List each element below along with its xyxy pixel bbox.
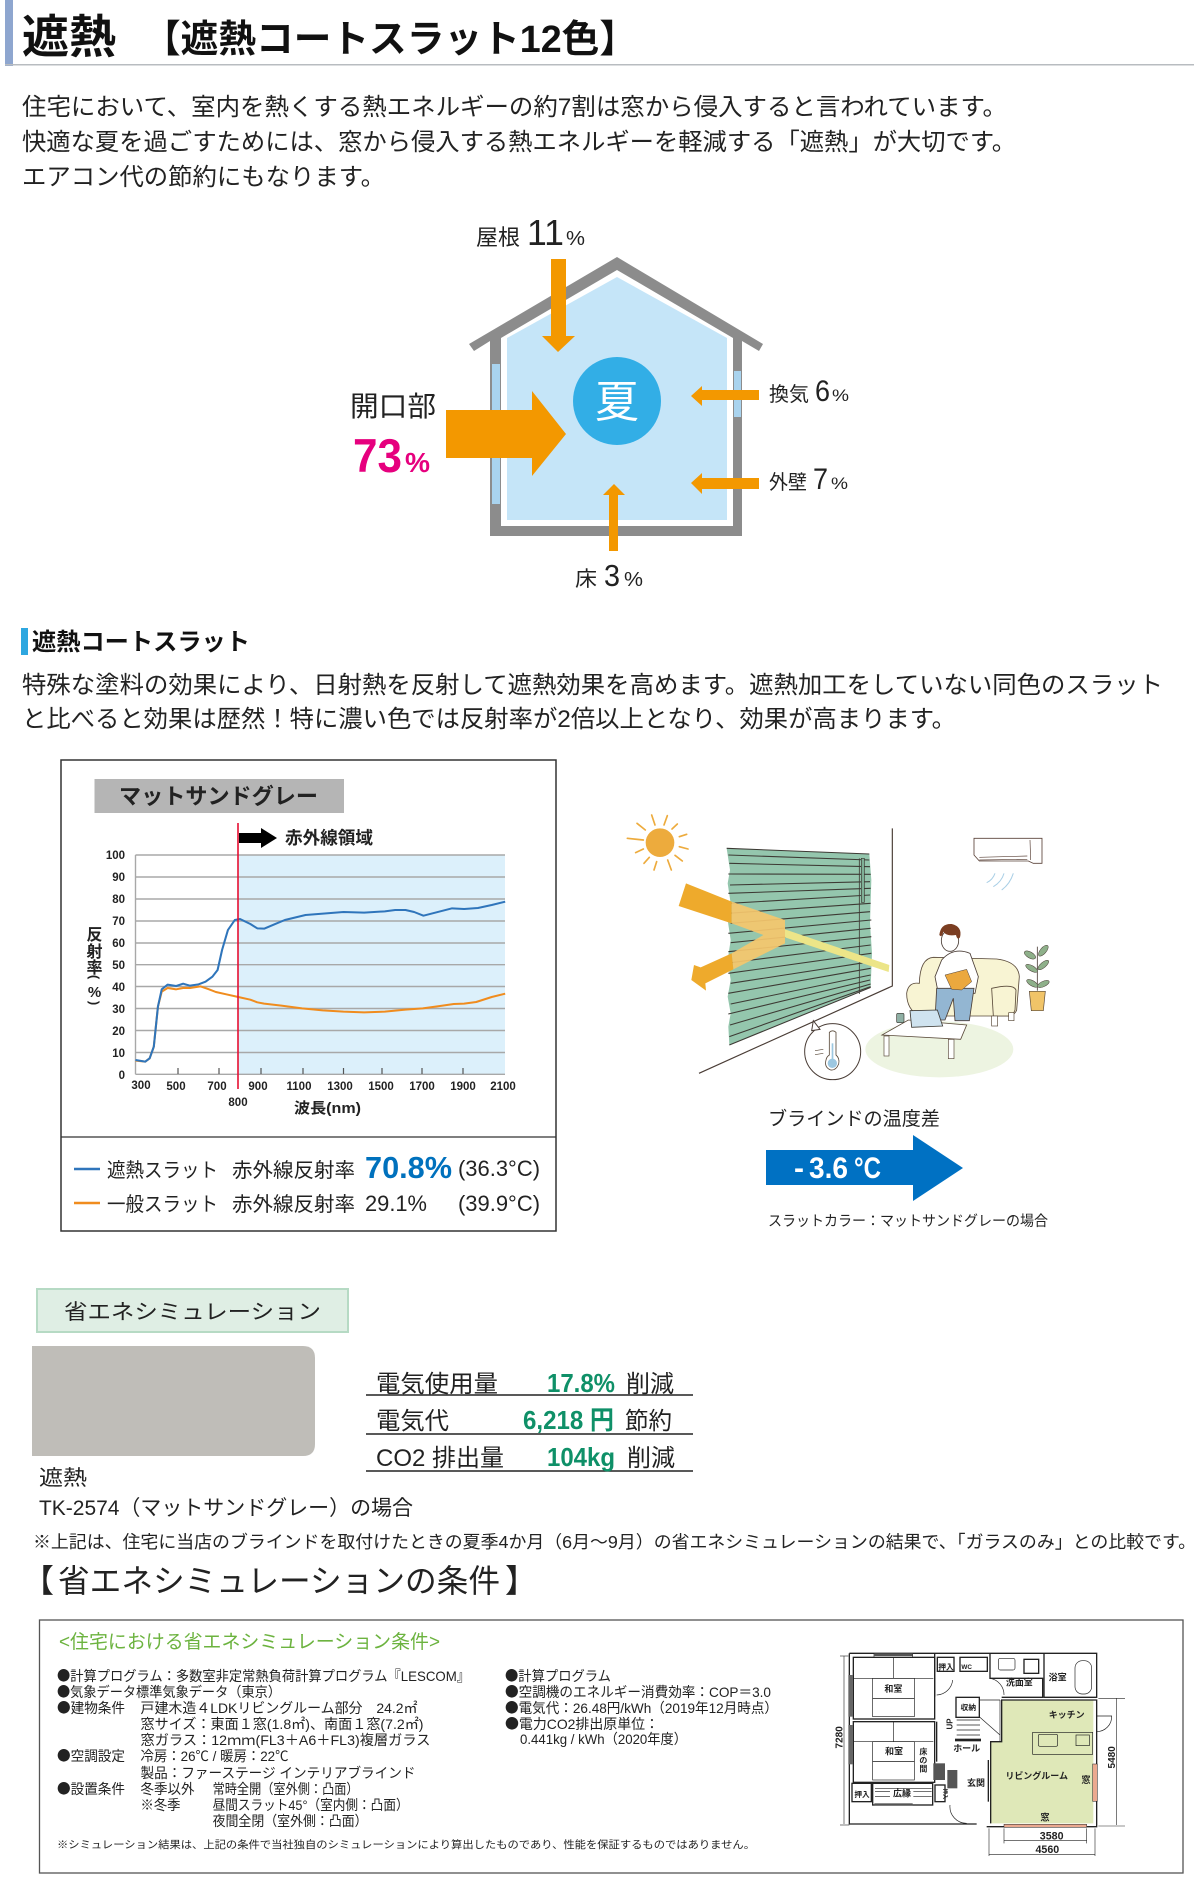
label: wall 7%: % — [831, 474, 848, 493]
simulation footnote: ※上記は、住宅に当店のブラインドを取付けたときの夏季4か月（6月～9月）の省エネシミュレーションの結果で、「ガラスのみ」との比較です。 — [33, 1532, 1196, 1552]
conditions left column: ●計算プログラム：多数室非定常熱負荷計算プログラム『LESCOM』 — [57, 1666, 470, 1686]
arrow: transmitted light — [785, 929, 889, 972]
floor plan labels — [835, 1662, 1118, 1856]
section body text: 特殊な塗料の効果により、日射熱を反射して遮熱効果を高めます。遮熱加工をしていない同色のスラット — [22, 672, 1163, 699]
x axis labels: 1500 — [368, 1081, 394, 1093]
label: opening 73%: % — [405, 447, 430, 478]
subtitle: 遮熱コートスラット12色: 【遮熱コートスラット12色】 — [143, 19, 637, 61]
conditions left column: ●空調設定 — [57, 1746, 125, 1766]
floor plan labels: 窓 — [1082, 1774, 1091, 1785]
icon: plant — [1023, 944, 1050, 1011]
legend: heat shielding slat — [74, 1150, 540, 1185]
house heat diagram — [350, 212, 849, 593]
arrow: incoming and reflected heat — [679, 883, 785, 991]
y axis title — [86, 927, 103, 1005]
floor plan labels: 7280 — [835, 1726, 846, 1748]
floor plan labels: 収納 — [961, 1702, 976, 1712]
label: ventilation 6% — [769, 375, 849, 408]
floor plan labels: 広縁 — [893, 1788, 911, 1799]
line: standard slat — [136, 986, 505, 1062]
swatch caption: TK-2574（マットサンドグレー）の場合 — [39, 1497, 413, 1520]
y axis labels: 60 — [112, 938, 125, 950]
label: wall 7% — [769, 463, 848, 496]
label: opening 73%: 73 — [353, 429, 402, 482]
intro text — [22, 94, 1016, 191]
y axis labels: 90 — [112, 872, 125, 884]
floor plan — [835, 1653, 1125, 1856]
panel: reflectance chart — [61, 760, 556, 1231]
savings table: 削減 — [626, 1371, 674, 1398]
icon: thermometer bubble — [805, 1021, 861, 1080]
label: ventilation 6%: 換気 — [769, 383, 809, 406]
conditions title: <住宅における省エネシミュレーション条件> — [59, 1631, 440, 1653]
chart title label: マットサンドグレー — [119, 784, 318, 809]
summer circle — [573, 357, 661, 445]
arrow: wall — [691, 473, 759, 494]
conditions right column: ●電力CO2排出原単位： — [505, 1714, 659, 1734]
slat color note: スラットカラー：マットサンドグレーの場合 — [768, 1213, 1048, 1230]
floor plan labels: 4560 — [1035, 1844, 1059, 1856]
floor plan labels: 和室 — [884, 1683, 902, 1694]
y axis title: 率 — [86, 959, 103, 977]
y axis labels: 70 — [112, 916, 125, 928]
y axis title: % — [88, 984, 101, 1001]
y axis labels: 0 — [119, 1070, 125, 1082]
floor plan labels: キッチン — [1049, 1710, 1085, 1720]
legend: standard slat — [74, 1191, 540, 1216]
conditions left column: ●設置条件 — [57, 1779, 125, 1799]
y axis labels: 10 — [112, 1048, 125, 1060]
legend: standard slat: 一般スラット — [107, 1193, 218, 1216]
line: heat shielding slat — [136, 902, 505, 1062]
y axis title: 反 — [86, 927, 103, 944]
arrow: roof — [542, 259, 575, 352]
conditions right column: ●計算プログラム — [505, 1666, 611, 1686]
savings table: 電気代 — [376, 1408, 449, 1435]
intro text: エアコン代の節約にもなります。 — [22, 164, 385, 191]
floor plan labels: 押入 — [938, 1662, 954, 1672]
infrared label: 赤外線領域 — [285, 828, 374, 848]
conditions left column: ※冬季 — [140, 1797, 180, 1813]
panel: simulation conditions — [40, 1620, 1183, 1873]
icon: sun — [627, 815, 688, 870]
conditions note: ※シミュレーション結果は、上記の条件で当社独自のシミュレーションにより算出したものであり、性能を保証するものではありません。 — [57, 1838, 755, 1851]
conditions left column: 冬季以外 — [140, 1781, 194, 1797]
floor plan labels: 間 — [919, 1765, 927, 1774]
swatch caption — [39, 1467, 413, 1520]
floor plan labels: WC — [961, 1664, 972, 1671]
y axis labels: 80 — [112, 894, 125, 906]
floor plan labels: 押入 — [941, 1789, 949, 1800]
rug — [865, 1021, 1013, 1077]
label: opening 73%: 開口部 — [350, 391, 436, 422]
fixtures — [854, 1653, 1112, 1823]
chart title label — [94, 779, 344, 813]
x axis labels: 1100 — [287, 1081, 311, 1093]
interior — [507, 277, 727, 520]
conditions heading: 【 — [22, 1563, 54, 1599]
conditions right column: ●空調機のエネルギー消費効率：COP＝3.0 — [505, 1682, 771, 1702]
savings table: 6,218 円 — [523, 1405, 614, 1435]
x axis labels: 1900 — [450, 1081, 476, 1093]
arrow: temperature difference: 3.6 — [809, 1152, 848, 1185]
legend: heat shielding slat: 赤外線反射率 — [232, 1159, 355, 1182]
conditions left column — [57, 1666, 470, 1829]
y axis labels: 40 — [112, 982, 125, 994]
y axis title: ( — [87, 975, 102, 980]
conditions heading: 省エネシミュレーションの条件 — [58, 1563, 500, 1599]
floor plan labels: 床 — [919, 1747, 927, 1756]
dimension lines — [840, 1656, 1125, 1856]
energy simulation tag — [37, 1289, 348, 1332]
label: floor 3%: 床 — [575, 568, 597, 591]
label: roof 11%: 屋根 — [476, 225, 520, 250]
savings table: 104kg — [547, 1442, 615, 1472]
y axis labels: 50 — [112, 960, 125, 972]
house walls and roof — [469, 257, 763, 536]
label: floor 3%: 3 — [604, 558, 620, 593]
conditions right column — [505, 1666, 778, 1747]
floor plan labels: UP — [946, 1718, 955, 1730]
floor plan labels: 窓 — [1041, 1811, 1050, 1822]
savings table: 削減 — [627, 1445, 675, 1472]
section body text — [22, 672, 1163, 733]
intro text: 快適な夏を過ごすためには、窓から侵入する熱エネルギーを軽減する「遮熱」が大切です。 — [22, 129, 1016, 156]
intro text: 住宅において、室内を熱くする熱エネルギーの約7割は窓から侵入すると言われています。 — [22, 94, 1007, 121]
infrared region shading — [238, 855, 505, 1074]
legend: heat shielding slat: 遮熱スラット — [107, 1159, 218, 1182]
label: ventilation 6%: 6 — [815, 375, 830, 408]
conditions left column: 夜間全閉（室外側：凸面） — [213, 1813, 368, 1829]
header: title band — [5, 0, 1194, 66]
floor plan labels: リビングルーム — [1005, 1770, 1068, 1781]
summer circle: 夏 — [595, 378, 639, 427]
savings table: CO2 排出量 — [376, 1445, 504, 1472]
conditions left column: ●建物条件 — [57, 1698, 125, 1718]
label: wall 7%: 外壁 — [769, 471, 807, 494]
table with laptop — [882, 1010, 967, 1059]
energy simulation tag: 省エネシミュレーション — [64, 1301, 321, 1324]
x axis labels: 700 — [207, 1081, 227, 1093]
conditions left column: 窓サイズ：東面１窓(1.8㎡)、南面１窓(7.2㎡) — [140, 1716, 424, 1732]
arrow: temperature difference: - — [794, 1152, 804, 1185]
savings table: 17.8% — [547, 1368, 615, 1398]
floor plan labels: 玄関 — [967, 1777, 985, 1788]
arrow: temperature difference: °C — [854, 1152, 881, 1185]
blind — [727, 848, 872, 1045]
conditions left column: 製品：ファーステージ インテリアブラインド — [140, 1765, 416, 1781]
label: roof 11% — [476, 212, 585, 253]
conditions left column: 窓ガラス：12ｍｍ(FL3＋A6＋FL3)複層ガラス — [140, 1732, 430, 1748]
color swatch — [32, 1346, 315, 1456]
x axis labels: 300 — [131, 1080, 151, 1092]
axis ticks — [178, 1068, 463, 1074]
floor plan labels: 押入 — [854, 1789, 870, 1799]
conditions left column: ●気象データ標準気象データ（東京） — [57, 1682, 281, 1702]
legend: standard slat: 29.1% — [365, 1191, 427, 1216]
legend: heat shielding slat: 70.8% — [365, 1150, 452, 1185]
swatch caption: 遮熱 — [39, 1467, 87, 1490]
marker: 800nm red line — [237, 823, 239, 1089]
arrow: temperature difference — [766, 1135, 963, 1201]
section body text: と比べると効果は歴然！特に濃い色では反射率が2倍以上となり、効果が高まります。 — [22, 706, 956, 733]
floor plan labels: 5480 — [1107, 1746, 1118, 1768]
arrow: opening — [446, 391, 566, 476]
floor plan labels: 3580 — [1040, 1830, 1064, 1842]
x axis labels: 900 — [248, 1081, 268, 1093]
windows — [492, 364, 500, 504]
y axis labels: 30 — [112, 1004, 125, 1016]
illustration: blind and room — [627, 815, 1050, 1080]
section heading: 遮熱コートスラット: 遮熱コートスラット — [32, 629, 250, 656]
conditions left column: 冷房：26℃ / 暖房：22℃ — [140, 1748, 288, 1764]
x axis labels: 2100 — [490, 1081, 516, 1093]
y axis title: 射 — [86, 943, 103, 961]
floor plan labels: 和室 — [885, 1745, 903, 1756]
legend: heat shielding slat: (36.3°C) — [458, 1156, 540, 1181]
y axis labels — [106, 850, 125, 1082]
conditions right column: 0.441kg / kWh（2020年度） — [520, 1731, 687, 1747]
label: wall 7%: 7 — [813, 463, 828, 496]
walls — [849, 1653, 1097, 1827]
x axis labels: 800 — [228, 1097, 248, 1109]
x axis labels — [131, 1080, 516, 1109]
savings table: 節約 — [625, 1408, 672, 1435]
label: floor 3%: % — [624, 569, 643, 591]
y axis labels: 100 — [106, 850, 125, 862]
person — [935, 924, 978, 1021]
label: ventilation 6%: % — [832, 386, 849, 405]
x axis labels: 1700 — [409, 1081, 435, 1093]
y axis labels: 20 — [112, 1026, 125, 1038]
grid lines — [136, 855, 505, 1074]
label: opening 73% — [350, 391, 436, 482]
x axis title: 波長(nm) — [294, 1099, 361, 1117]
x axis labels: 500 — [166, 1081, 186, 1093]
label: roof 11%: 11 — [527, 212, 564, 253]
temperature difference heading: ブラインドの温度差 — [768, 1107, 940, 1130]
arrow: infrared region — [239, 828, 277, 848]
legend: standard slat: 赤外線反射率 — [232, 1193, 355, 1216]
conditions left column: 戸建木造４LDKリビングルーム部分 24.2㎡ — [140, 1700, 418, 1716]
floor plan labels: 浴室 — [1049, 1672, 1067, 1683]
savings table — [366, 1368, 693, 1472]
conditions right column: ●電気代：26.48円/kWh（2019年12月時点） — [505, 1698, 778, 1718]
arrow: ventilation — [691, 386, 759, 406]
wall and floor line — [699, 828, 892, 1073]
conditions left column: 常時全開（室外側：凸面） — [213, 1781, 359, 1797]
conditions heading: 】 — [505, 1563, 537, 1599]
floor plan labels: の — [919, 1756, 927, 1765]
icon: air conditioner — [974, 838, 1042, 890]
label: floor 3% — [575, 558, 643, 593]
conditions left column: 昼間スラット45°（室内側：凸面） — [213, 1797, 409, 1813]
floor plan labels: 洗面室 — [1006, 1676, 1033, 1687]
legend: standard slat: (39.9°C) — [458, 1191, 540, 1216]
sofa — [907, 957, 1019, 1026]
windows — [1004, 1824, 1087, 1827]
arrow: floor — [603, 484, 625, 551]
floor plan labels: ホール — [953, 1743, 980, 1753]
savings table: 電気使用量 — [376, 1371, 498, 1398]
living room — [991, 1700, 1093, 1823]
x axis labels: 1300 — [327, 1081, 353, 1093]
y axis title: ) — [87, 1001, 102, 1005]
title: 遮熱: 遮熱 — [22, 11, 116, 63]
label: roof 11%: % — [566, 228, 585, 250]
